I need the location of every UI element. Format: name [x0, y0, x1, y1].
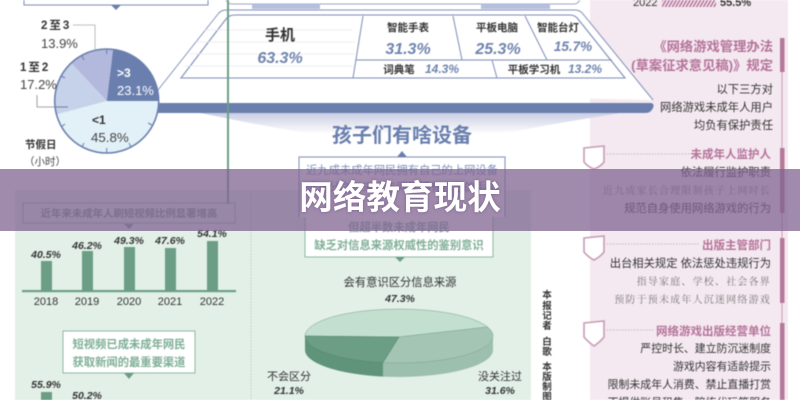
section: publishing authority [584, 236, 784, 306]
byline vertical text: 白 [542, 336, 552, 348]
device: dictionary pen: 14.3% [425, 62, 459, 76]
section: game publishers: 游戏内容有适龄提示 [673, 359, 771, 373]
pie label: over 3: 23.1% [117, 83, 154, 98]
pie label: 1 to 2: 17.2% [20, 77, 57, 92]
label: never noticed [478, 369, 522, 397]
label: cannot distinguish [267, 370, 311, 397]
device: learning tablet [508, 62, 602, 76]
top callout box fragment [24, 0, 208, 10]
gradient under device bar [200, 113, 620, 134]
byline vertical text: 歌 [542, 346, 552, 358]
bar chart: short video usage: 2022 [200, 296, 224, 308]
pie label: 2 to 3 [41, 19, 95, 51]
byline vertical text [542, 289, 552, 400]
pie caption: holiday hours [24, 138, 66, 168]
label: aware: 47.3% [384, 293, 416, 305]
device: learning tablet: 13.2% [568, 62, 602, 76]
device: learning tablet: 平板学习机 [508, 63, 561, 76]
device: smart watch: 智能手表 [387, 21, 429, 34]
pie caption: holiday hours: （小时） [24, 156, 66, 168]
device: smart lamp [537, 21, 592, 54]
byline vertical text: 本 [542, 361, 552, 373]
device: smart lamp: 15.7% [554, 39, 592, 54]
top hatch bar row [633, 0, 751, 9]
text: three parties: 网络游戏未成年人用户 [660, 100, 773, 114]
heading: game regulation [631, 38, 784, 73]
text: three parties: 均负有保护责任 [694, 118, 773, 132]
bar chart: short video usage: 2021 [158, 296, 182, 308]
pie label: under 1: <1 [92, 113, 106, 127]
byline vertical text: 记 [542, 311, 552, 322]
title: 网络教育现状 [299, 180, 501, 217]
top device box fragment [226, 0, 580, 9]
byline vertical text: 版 [542, 371, 552, 383]
section: guardians: 近九成家长合理限制孩子上网时长 [603, 184, 771, 197]
bar chart: short video usage: 2019 [75, 296, 99, 308]
green vertical line [227, 0, 229, 204]
section: guardians [584, 146, 784, 215]
section: game publishers: 网络游戏出版经营单位 [656, 324, 771, 338]
pie label: under 1 [91, 113, 129, 145]
callout: short video heading: 近年来未成年人刷短视频比例显著增高 [41, 207, 217, 220]
device: tablet [474, 21, 521, 58]
label: cannot distinguish: 不会区分 [267, 370, 311, 383]
right vertical line [781, 38, 783, 400]
bar chart: short video usage: 2018 [34, 296, 58, 308]
bar chart: news channel fragment [31, 379, 103, 400]
bar chart: short video usage: 2020 [117, 296, 141, 308]
pie caption: holiday hours: 节假日 [25, 138, 56, 151]
bar chart: short video usage: 47.6% [154, 235, 186, 247]
device: phone: 63.3% [257, 50, 303, 67]
3D pie chart [267, 275, 522, 397]
panel: pink background right [590, 0, 788, 400]
device: phone [257, 27, 303, 67]
callout: device ownership: 近九成未成年网民拥有自己的上网设备 [306, 163, 498, 177]
callout: news channel: 获取新闻的最重要渠道 [73, 355, 185, 369]
callout: news channel [63, 331, 195, 379]
blue bar [155, 103, 654, 113]
device: dictionary pen: 词典笔 [383, 63, 415, 76]
label: never noticed: 没关注过 [478, 369, 522, 383]
heading: devices: 孩子们有啥设备 [332, 123, 472, 147]
text: three parties: 以下三方对 [716, 82, 773, 96]
panel: green background center [251, 190, 531, 400]
label: aware [344, 275, 456, 305]
section: guardians: 未成年人监护人 [690, 147, 771, 161]
section: game publishers: 限制未成年人消费、禁止直播打赏 [608, 377, 771, 391]
pie label: over 3 [117, 66, 154, 98]
callout: device ownership [299, 151, 505, 262]
bar chart: short video usage: 40.5% [30, 249, 62, 261]
clock pie chart [20, 19, 159, 168]
text: three parties [660, 82, 773, 132]
pie label: under 1: 45.8% [91, 130, 129, 145]
callout: device ownership: 近三分之二未成年网民拥有自己的手机 [306, 180, 499, 194]
title band overlay [0, 169, 800, 231]
callout: short video heading [23, 203, 235, 229]
device: smart watch [385, 21, 431, 58]
section: game publishers [584, 321, 784, 400]
device: phone: 手机 [265, 27, 295, 44]
heading: game regulation: 《网络游戏管理办法 [653, 38, 773, 54]
device: tablet: 25.3% [474, 41, 521, 58]
device pyramid table [155, 10, 654, 113]
bar chart: short video usage: 54.1% [197, 228, 228, 240]
byline vertical text: 本 [542, 289, 552, 301]
device: dictionary pen [383, 62, 459, 76]
icon: shield [584, 146, 604, 169]
pie label: 2 to 3: 2至3 [41, 19, 71, 32]
byline vertical text: 者 [542, 320, 552, 332]
device: smart watch: 31.3% [385, 41, 431, 58]
icon: shield [584, 236, 604, 260]
callout: device ownership: 但超半数未成年网民 [348, 220, 450, 234]
section: guardians: 规范自身使用网络游戏的行为 [624, 201, 771, 215]
pie label: 1 to 2 [20, 61, 57, 107]
pie label: 1 to 2: 1至2 [20, 61, 50, 74]
section: publishing authority: 指导家庭、学校、社会各界 [637, 275, 771, 288]
section: publishing authority: 预防于预未成年人沉迷网络游戏 [614, 293, 771, 306]
byline vertical text: 报 [542, 300, 552, 312]
bar chart: short video usage: 49.3% [113, 235, 145, 247]
device: tablet: 平板电脑 [476, 21, 518, 34]
section: guardians: 依法履行监护职责 [681, 165, 771, 179]
bar chart: news channel fragment: 55.9% [31, 379, 62, 391]
heading: game regulation: (草案征求意见稿)》规定 [631, 57, 773, 73]
callout: news channel: 短视频已成未成年网民 [73, 337, 185, 351]
section: game publishers: 严控时长、建立防沉迷制度 [640, 341, 771, 355]
panel: green background left [15, 190, 251, 400]
label: aware: 会有意识区分信息来源 [344, 275, 456, 289]
label: never noticed: 31.6% [485, 385, 516, 397]
pie label: over 3: >3 [117, 66, 131, 80]
bar chart: short video usage: 46.2% [71, 240, 103, 252]
bar chart: short video usage [22, 228, 236, 308]
label: cannot distinguish: 21.1% [273, 385, 305, 397]
section: publishing authority: 出版主管部门 [702, 238, 771, 252]
section: publishing authority: 出台相关规定 依法惩处违规行为 [610, 256, 771, 270]
pie label: 2 to 3: 13.9% [41, 36, 78, 51]
icon: shield [584, 321, 604, 346]
byline vertical text: 制 [542, 381, 552, 393]
callout: device ownership: 缺乏对信息来源权威性的鉴别意识 [314, 238, 484, 252]
device: smart lamp: 智能台灯 [537, 21, 579, 34]
